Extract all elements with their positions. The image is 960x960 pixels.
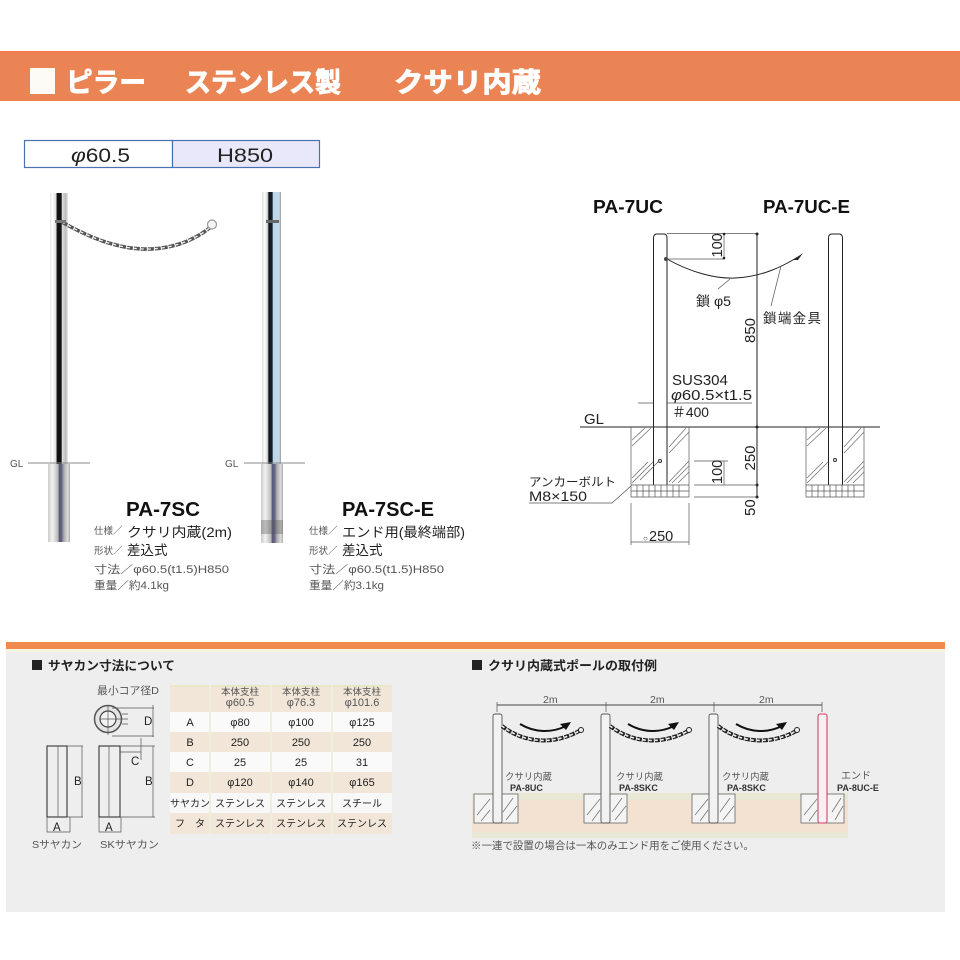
product spec: PA-7SC-E: 仕様／ [309, 525, 338, 537]
dimension: square 250: ○ [643, 534, 648, 543]
product spec: PA-7SC: 形状／ [94, 545, 123, 557]
S sleeve side view: Sサヤカン [32, 839, 82, 851]
size tag: diameter and height: H850 [217, 146, 273, 167]
product spec: PA-7SC-E: エンド用(最終端部) [342, 525, 465, 540]
row C: 31 [356, 757, 368, 769]
row B: 250 [353, 737, 371, 749]
note: material SUS304 [638, 372, 752, 420]
row D: φ140 [288, 777, 314, 789]
table header: φ101.6 [345, 697, 379, 709]
note: material SUS304: ＃400 [672, 404, 709, 420]
foundation pit left [631, 427, 689, 497]
product spec: PA-7SC: 差込式 [127, 543, 168, 558]
product spec: PA-7SC: クサリ内蔵(2m) [127, 525, 232, 540]
dimension: 100 top: 100 [710, 233, 726, 258]
end pole, red: PA-8UC-E [837, 783, 879, 793]
installation example diagram [472, 694, 879, 838]
foundation hatching [477, 798, 843, 821]
row B: B [186, 737, 194, 749]
core diameter label: 最小コア径D [97, 684, 159, 697]
pole 1: PA-8UC [510, 783, 543, 793]
SK sleeve side view [99, 738, 159, 851]
pole 3 [709, 714, 770, 823]
table header: 本体支柱 [221, 686, 259, 698]
S sleeve side view: A [53, 822, 61, 834]
top view of sleeve [94, 705, 154, 737]
drawing heading: PA-7UC: PA-7UC [593, 197, 663, 217]
end pole, red [818, 714, 879, 823]
row D: φ165 [349, 777, 375, 789]
dimension: 100 anchor: 100 [710, 460, 726, 484]
row sleeve material: ステンレス [276, 799, 326, 810]
title banner [0, 51, 960, 101]
row lid material: ステンレス [337, 819, 387, 830]
product spec: PA-7SC: 仕様／ [94, 525, 123, 537]
SK sleeve side view: SKサヤカン [100, 839, 159, 851]
sleeve diagrams [32, 684, 159, 851]
row C: C [186, 757, 194, 769]
label: chain end fitting: 鎖端金具 [763, 311, 821, 326]
title banner: ピラー [66, 68, 146, 98]
row B: 250 [292, 737, 310, 749]
pole 2: PA-8SKC [619, 783, 658, 793]
row lid material: フ タ [175, 818, 205, 830]
spacing dimension line: 2m [759, 694, 774, 706]
row sleeve material: サヤカン [170, 798, 210, 810]
row D: D [186, 777, 194, 789]
label: anchor bolt: アンカーボルト [529, 475, 616, 489]
row B: 250 [231, 737, 249, 749]
row A: φ80 [230, 717, 250, 729]
product spec: PA-7SC: PA-7SC [126, 499, 200, 521]
chains [502, 726, 800, 740]
photo: pole PA-7SC with chain [10, 193, 216, 542]
dimension: 100 top [667, 233, 758, 259]
row lid material: ステンレス [276, 819, 326, 830]
product spec: PA-7SC: 寸法／φ60.5(t1.5)H850 [94, 562, 229, 576]
foundation pit right [806, 427, 864, 497]
product spec: PA-7SC-E: 寸法／φ60.5(t1.5)H850 [309, 562, 444, 576]
product spec: PA-7SC [94, 499, 232, 592]
spacing dimension line: 2m [650, 694, 665, 706]
spacing dimension line: 2m [543, 694, 558, 706]
dimension: 50 base: 50 [742, 499, 759, 516]
heading: sleeve dimensions: サヤカン寸法について [48, 658, 175, 673]
row A: φ100 [288, 717, 314, 729]
top view of sleeve: D [144, 716, 152, 728]
drawing: right pole [828, 234, 842, 485]
motion arrows [520, 722, 787, 731]
row A: A [186, 717, 194, 729]
pole 3: PA-8SKC [727, 783, 766, 793]
row sleeve material [170, 798, 382, 810]
note: material SUS304: SUS304 [672, 372, 728, 389]
technical drawing: dimensions of PA-7UC and PA-7UC-E [529, 197, 880, 545]
row B [186, 737, 371, 749]
S sleeve side view [32, 746, 83, 851]
table header: 本体支柱 [343, 686, 381, 698]
drawing heading: PA-7UC-E: PA-7UC-E [763, 197, 850, 217]
sleeve dimensions table [170, 685, 392, 834]
pole 2: クサリ内蔵 [616, 771, 664, 782]
row C: 25 [234, 757, 246, 769]
dimension: square 250: 250 [649, 529, 673, 545]
row D: φ120 [227, 777, 253, 789]
table header [221, 686, 381, 709]
row C [186, 757, 368, 769]
row A: φ125 [349, 717, 375, 729]
table header: φ76.3 [287, 697, 315, 709]
photo: pole PA-7SC with chain: GL [10, 459, 24, 470]
label: anchor bolt: M8×150 [529, 488, 587, 504]
row sleeve material: スチール [342, 798, 382, 810]
product spec: PA-7SC-E: 差込式 [342, 543, 383, 558]
SK sleeve side view: A [105, 822, 113, 834]
row lid material [175, 818, 387, 830]
title banner: ステンレス製 [185, 68, 341, 98]
heading: installation example: クサリ内蔵式ポールの取付例 [488, 658, 657, 673]
product spec: PA-7SC-E: 重量／約3.1kg [309, 578, 384, 592]
product spec: PA-7SC-E [309, 499, 465, 592]
row sleeve material: ステンレス [215, 799, 265, 810]
pole 2 [601, 714, 664, 823]
label: chain diameter: 鎖 φ5 [696, 294, 731, 309]
label: chain diameter [696, 279, 731, 309]
title banner: クサリ内蔵 [394, 68, 541, 98]
row lid material: ステンレス [215, 819, 265, 830]
lower panel background [6, 642, 945, 912]
ground band [472, 793, 848, 838]
S sleeve side view: B [74, 776, 82, 788]
dimension: square 250 [631, 503, 689, 545]
pole 3: クサリ内蔵 [722, 771, 770, 782]
product spec: PA-7SC-E: PA-7SC-E [342, 499, 434, 521]
foundations [474, 794, 844, 823]
end pole, red: エンド [841, 771, 871, 782]
table header: 本体支柱 [282, 686, 320, 698]
pole 1: クサリ内蔵 [505, 771, 553, 782]
dimension: 100 anchor [694, 460, 757, 497]
product spec: PA-7SC-E: 形状／ [309, 545, 338, 557]
dimension: 850 and total: 850 [742, 318, 759, 343]
photo: pole PA-7SC-E [225, 192, 305, 543]
label: anchor bolt [529, 461, 659, 504]
ground line GL: GL [584, 411, 604, 428]
dimension: 250 depth: 250 [742, 445, 759, 470]
product spec: PA-7SC: 重量／約4.1kg [94, 578, 169, 592]
size tag: diameter and height [24, 140, 320, 168]
drawing: chain curve [664, 253, 803, 278]
spacing dimension line [497, 694, 822, 712]
photo: pole PA-7SC-E: GL [225, 459, 239, 470]
row D [186, 777, 375, 789]
table header: φ60.5 [226, 697, 254, 709]
drawing: left pole [654, 234, 667, 485]
footnote: ※一連で設置の場合は一本のみエンド用をご使用ください。 [471, 839, 754, 852]
row A [186, 717, 375, 729]
dimension: 850 and total [742, 232, 759, 498]
note: material SUS304: φ60.5×t1.5 [671, 388, 752, 404]
SK sleeve side view: C [131, 756, 139, 768]
pole 1 [493, 714, 553, 823]
size tag: diameter and height: φ60.5 [71, 146, 130, 167]
row C: 25 [295, 757, 307, 769]
SK sleeve side view: B [145, 776, 153, 788]
label: chain end fitting [763, 266, 821, 326]
